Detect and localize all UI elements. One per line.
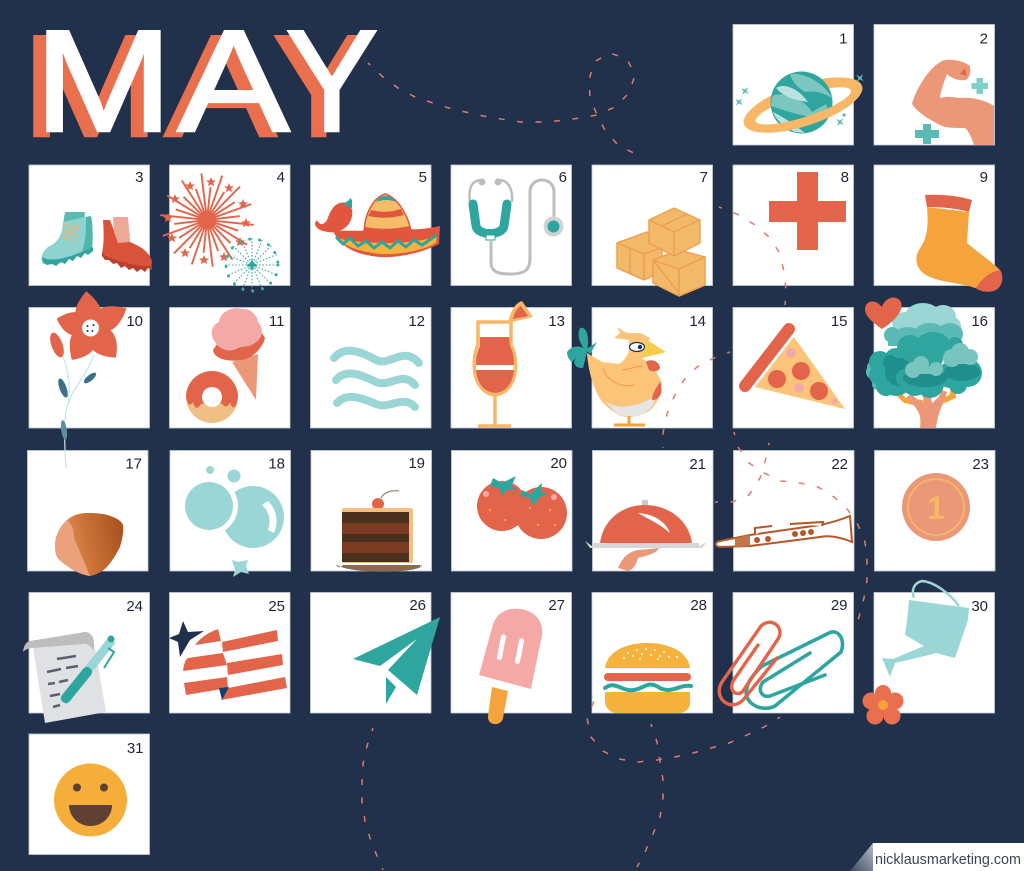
day 22: oboe (716, 450, 854, 571)
title: MAY: M (34, 1, 173, 163)
day 14: chicken (567, 308, 712, 428)
day 8: red cross (733, 165, 854, 286)
day 17: hazelnut (28, 450, 148, 576)
dashed flight path (362, 53, 867, 870)
day 18: bubbles: 18 (268, 456, 285, 472)
day 27: popsicle (451, 592, 572, 724)
day 1: planet: 1 (839, 30, 848, 48)
day 3: boots (29, 165, 152, 286)
day 30: watering can (874, 581, 994, 713)
day 20: tomatoes: 20 (550, 455, 567, 472)
day 5: sombrero and chili (310, 165, 440, 286)
day 12: water waves (310, 308, 431, 428)
day 15: pizza slice: 15 (831, 313, 848, 330)
day 4: fireworks (160, 165, 290, 292)
day 6: stethoscope (451, 165, 572, 286)
day 23: coin: 1 (927, 490, 945, 526)
title: MAY: Y (286, 0, 378, 163)
day 27: popsicle: 27 (548, 597, 565, 614)
day 5: sombrero and chili: 5 (419, 169, 427, 186)
day 12: water waves: 12 (408, 313, 425, 330)
day 19: cake: 19 (408, 455, 425, 472)
day 1: planet (732, 24, 868, 145)
icon: red flower (862, 685, 904, 724)
day 25: flag: 25 (268, 598, 285, 615)
day 13: cocktail: 13 (548, 313, 565, 330)
day 10: flower (29, 290, 150, 468)
day 10: flower: 10 (126, 313, 143, 330)
day 13: cocktail (451, 301, 572, 428)
title: MAY: M (21, 6, 160, 168)
day 2: muscle arm (874, 24, 994, 145)
day 31: smiley: 31 (127, 740, 144, 757)
day 4: fireworks: 4 (277, 169, 285, 186)
day 15: pizza slice (733, 308, 854, 428)
day 25: flag (169, 592, 290, 713)
day 31: smiley (29, 734, 150, 854)
watermark: nicklausmarketing.com (850, 843, 1024, 871)
day 6: stethoscope: 6 (559, 169, 567, 186)
day 8: red cross: 8 (841, 169, 849, 186)
day 29: paper clips (719, 592, 854, 713)
day 18: bubbles (170, 450, 290, 577)
day 14: chicken: 14 (689, 313, 706, 330)
day 28: burger (592, 592, 712, 713)
day 16: tree and heart (865, 298, 994, 428)
day 17: hazelnut: 17 (125, 456, 142, 472)
title: MAY: A (177, 1, 290, 162)
watermark: nicklausmarketing.com: nicklausmarketing.com (875, 851, 1021, 868)
day 21: serving cloche (585, 450, 713, 571)
day 26: paper plane (310, 592, 440, 713)
day 21: serving cloche: 21 (689, 456, 706, 473)
day 11: ice cream and donut: 11 (269, 313, 284, 330)
title: MAY: A (164, 6, 277, 167)
day 23: coin: 23 (972, 456, 989, 473)
day 11: ice cream and donut (170, 308, 290, 428)
day 28: burger: 28 (690, 597, 707, 614)
day 24: note and pen (23, 592, 150, 723)
day 16: tree and heart: 16 (971, 313, 988, 330)
day 7: boxes (592, 165, 712, 296)
day 2: muscle arm: 2 (980, 30, 988, 48)
day 3: boots: 3 (135, 169, 144, 186)
day 22: oboe: 22 (831, 456, 848, 473)
day 19: cake (311, 450, 432, 572)
title: MAY (21, 0, 378, 168)
day 24: note and pen: 24 (126, 598, 143, 615)
day 20: tomatoes (452, 450, 572, 571)
day 26: paper plane: 26 (409, 597, 426, 614)
day 9: sock: 9 (980, 169, 988, 186)
day 23: coin (874, 450, 995, 571)
day 9: sock (874, 165, 1002, 292)
day 7: boxes: 7 (700, 169, 708, 186)
day 29: paper clips: 29 (831, 597, 848, 614)
day 30: watering can: 30 (971, 598, 988, 615)
title: MAY: Y (272, 5, 365, 168)
